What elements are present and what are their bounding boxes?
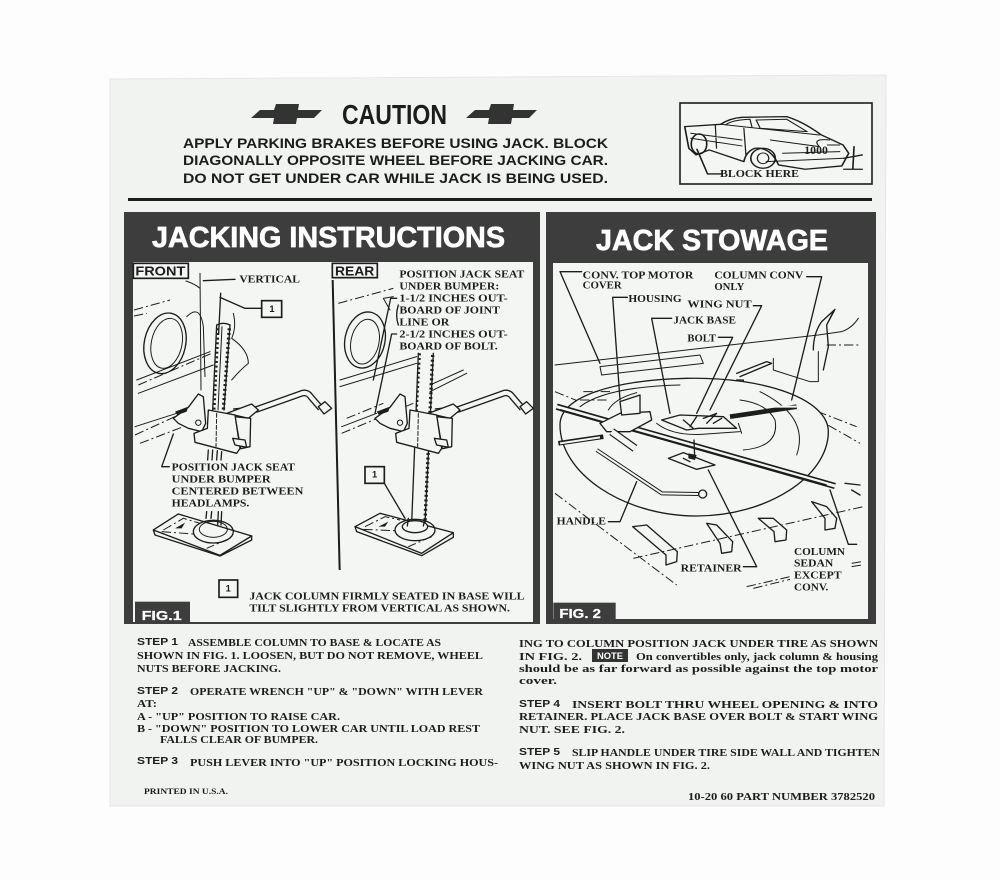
rear jack head and lever (375, 393, 533, 453)
diagram: spare tire with jack stowed (553, 270, 863, 622)
step 3 continued: On convertibles only, jack column & housing (636, 651, 879, 663)
diagram: front jack (134, 273, 332, 556)
handle (597, 450, 707, 498)
leader lines and labels: HOUSING (628, 294, 682, 305)
caution text: DIAGONALLY OPPOSITE WHEEL BEFORE JACKING CAR. (183, 152, 608, 168)
reference note: JACK COLUMN FIRMLY SEATED IN BASE WILL (249, 591, 525, 602)
leader lines and labels: HANDLE (557, 516, 606, 527)
step 3 (137, 755, 498, 769)
centre divider (333, 280, 340, 570)
fig 2 tab (553, 603, 616, 622)
steps: left column (137, 636, 498, 769)
rear reference box 1 (365, 467, 405, 518)
paper sheet (110, 75, 886, 806)
step 3 continued: cover. (519, 675, 557, 687)
rear position note: POSITION JACK SEAT (399, 270, 524, 281)
step 1: NUTS BEFORE JACKING. (137, 663, 281, 675)
step 2: B - "DOWN" POSITION TO LOWER CAR UNTIL LOAD REST (137, 723, 481, 735)
front jack seat note: CENTERED BETWEEN (172, 487, 304, 498)
step 2: STEP 2 (137, 685, 178, 697)
leader lines and labels: COLUMN (794, 547, 846, 558)
front jack seat note: POSITION JACK SEAT (172, 463, 295, 474)
footer: printed in usa: PRINTED IN U.S.A. (144, 786, 228, 796)
step 5: SLIP HANDLE UNDER TIRE SIDE WALL AND TIGHTEN (572, 747, 880, 759)
reference note (219, 580, 525, 614)
leader lines and labels: CONV. (794, 583, 829, 594)
heading: jacking instructions: JACKING INSTRUCTIONS (152, 222, 505, 254)
step 4 (519, 698, 879, 736)
panel: jack stowage (546, 212, 876, 624)
step 3: PUSH LEVER INTO "UP" POSITION LOCKING HOUS- (190, 757, 498, 769)
front jack seat note: UNDER BUMPER (172, 475, 271, 486)
caution text (183, 135, 608, 186)
column bar (557, 407, 835, 486)
rear position note (399, 270, 524, 353)
step 4: NUT. SEE FIG. 2. (519, 724, 625, 736)
panel: block here car illustration (680, 103, 872, 184)
front jack seat note (172, 463, 304, 510)
arrow to jack seat (162, 434, 173, 467)
front jack seat note: HEADLAMPS. (172, 499, 250, 510)
icon: right bowtie emblem (466, 104, 537, 124)
caution title: CAUTION (342, 99, 447, 130)
icon: car with jack (685, 117, 862, 174)
rear reference box 1: 1 (372, 470, 377, 480)
step 3 continued: should be as far forward as possible against the top motor (519, 663, 878, 675)
reference box 1 (262, 301, 282, 317)
rear column (412, 353, 433, 523)
block here label: BLOCK HERE (720, 169, 799, 180)
fig 2 tab: FIG. 2 (559, 607, 601, 621)
spare tire (560, 378, 828, 516)
rear position note: BOARD OF BOLT. (399, 342, 498, 353)
footer: part number: 10-20 60 PART NUMBER 3782520 (688, 792, 875, 803)
leader lines and labels: JACK BASE (673, 316, 736, 327)
step 5 (519, 746, 880, 772)
step 5: WING NUT AS SHOWN IN FIG. 2. (519, 760, 710, 772)
rear position note: UNDER BUMPER: (399, 282, 499, 293)
leader lines and labels: COLUMN CONV (714, 271, 804, 282)
housing (600, 393, 652, 448)
step 5: STEP 5 (519, 746, 560, 758)
reference note: TILT SLIGHTLY FROM VERTICAL AS SHOWN. (249, 603, 510, 614)
caution text: APPLY PARKING BRAKES BEFORE USING JACK. BLOCK (183, 135, 608, 151)
step 2: AT: (137, 698, 157, 710)
rear position note: BOARD OF JOINT (399, 306, 500, 317)
rear position note: 2-1/2 INCHES OUT- (399, 330, 508, 341)
step 4: INSERT BOLT THRU WHEEL OPENING & INTO (572, 699, 879, 711)
rear position note: 1-1/2 INCHES OUT- (399, 294, 508, 305)
step 3 continued: ING TO COLUMN POSITION JACK UNDER TIRE AS SHOWN (519, 638, 878, 650)
step 4: RETAINER. PLACE JACK BASE OVER BOLT & START WING (519, 711, 879, 723)
icon: car with jack: 1000 (804, 144, 828, 157)
tire supports (633, 483, 860, 565)
reference box 1: 1 (269, 304, 275, 314)
fig 1 tab: FIG.1 (142, 608, 182, 623)
leader lines and labels: BOLT (687, 333, 716, 344)
step 3: STEP 3 (137, 755, 178, 767)
step 1: ASSEMBLE COLUMN TO BASE & LOCATE AS (188, 637, 441, 649)
step 2: FALLS CLEAR OF BUMPER. (160, 734, 318, 746)
leader lines and labels: WING NUT (687, 300, 752, 311)
leader lines and labels: COVER (583, 280, 622, 291)
step 1 (137, 636, 483, 675)
leader lines and labels: SEDAN (794, 559, 834, 570)
leader lines and labels (557, 270, 857, 594)
step 2: OPERATE WRENCH "UP" & "DOWN" WITH LEVER (190, 686, 484, 698)
step 2 (137, 685, 484, 746)
vertical label: VERTICAL (239, 275, 300, 286)
leader lines and labels: CONV. TOP MOTOR (583, 270, 694, 281)
rear position note: LINE OR (399, 318, 450, 329)
rear label: REAR (335, 264, 374, 278)
step 4: STEP 4 (519, 698, 560, 710)
retainer (668, 440, 715, 469)
step 3 continued: IN FIG. 2. (519, 651, 582, 663)
leader lines and labels: ONLY (714, 282, 745, 293)
step 3 continued: NOTE (597, 651, 623, 662)
jack column (213, 323, 230, 410)
rear leader lines (373, 298, 398, 413)
step 1: SHOWN IN FIG. 1. LOOSEN, BUT DO NOT REMOVE, WHEEL (137, 650, 483, 662)
step 3 continued (519, 638, 879, 687)
panel: jacking instructions (124, 212, 540, 624)
jack base (153, 514, 252, 556)
caution text: DO NOT GET UNDER CAR WHILE JACK IS BEING USED. (183, 170, 608, 186)
jack base plate (657, 413, 740, 434)
leader lines and labels: RETAINER (681, 564, 742, 575)
leader lines and labels: EXCEPT (794, 571, 842, 582)
diagram: front and rear jacking (133, 263, 533, 623)
front label: FRONT (135, 264, 185, 279)
icon: left bowtie emblem (251, 104, 322, 124)
caution header (183, 99, 608, 186)
steps: right column (519, 638, 880, 772)
diagram: rear jack (338, 270, 533, 556)
rear jack base (355, 513, 453, 556)
reference note: 1 (226, 584, 231, 594)
step 2: A - "UP" POSITION TO RAISE CAR. (137, 711, 340, 723)
step 1: STEP 1 (137, 636, 178, 648)
heading: jack stowage: JACK STOWAGE (596, 225, 828, 257)
fig 1 tab (135, 602, 190, 623)
jack head and lever (173, 393, 332, 453)
background body lines (555, 309, 863, 588)
